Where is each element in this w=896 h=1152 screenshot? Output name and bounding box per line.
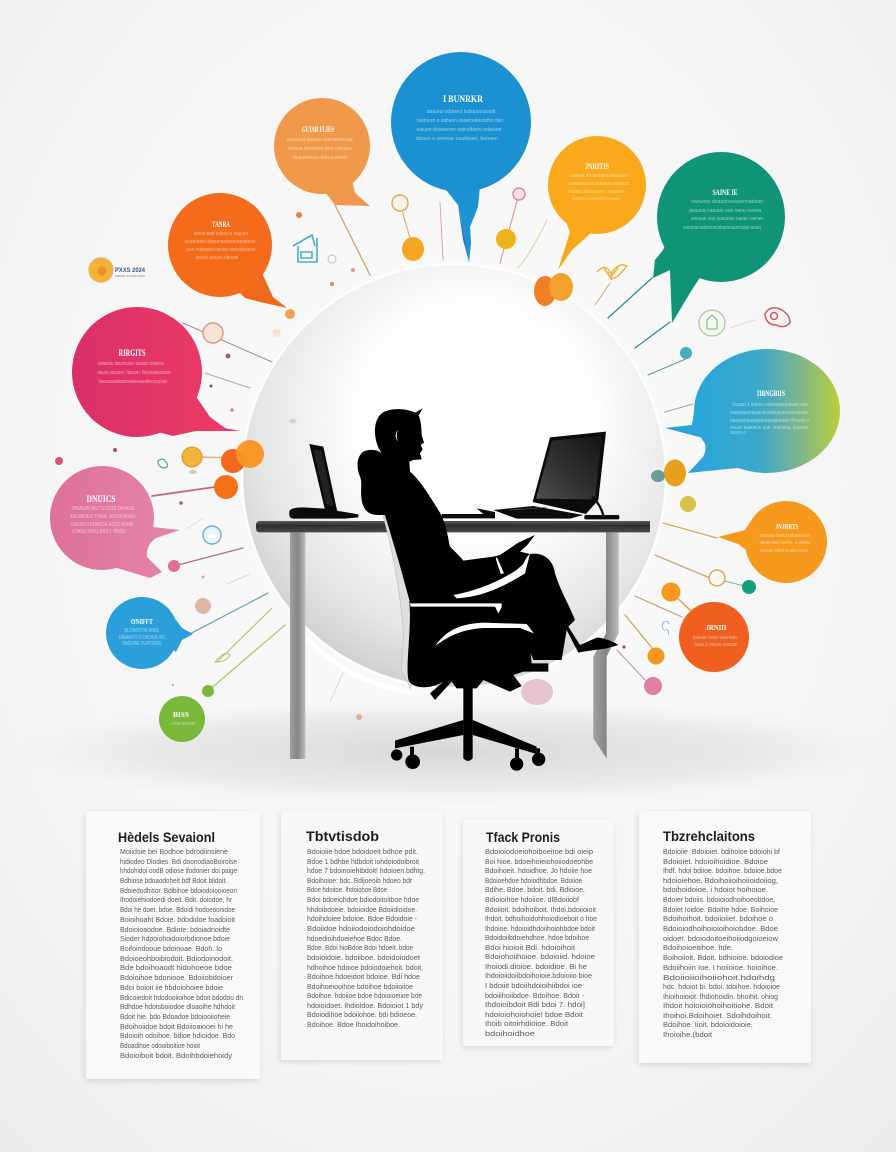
text panel: Tbzrehclaitons: Bdoier bdoiis. bdoioiodhoihoeobdoe, bbox=[663, 895, 775, 904]
text panel: Tbtvtis dob: hdhoihoe hdoioe bdoiodoiehoit. bdoit, bbox=[307, 963, 423, 972]
speech bubble: mauve: DINAUIN NIU TLOOOI DINAUE bbox=[72, 506, 135, 512]
speech bubble: small blue bbox=[106, 597, 193, 669]
text panel: Hedels Sevaionl: Bdoihoiidoe bdoit Bdoiioaiooei hi he bbox=[120, 1022, 233, 1031]
text panel: Tbtvtis dob: Bdoiidoe hdoiiodoiodoiohdoidoe bbox=[307, 924, 415, 933]
text panel: Tfack Pronis: Bdoi hioioit Bdi. hdoioihoit bbox=[485, 943, 576, 952]
text panel: Hedels Sevaionl: Boioihoaht Bdoie. bdodidoe foadoioit bbox=[120, 915, 236, 924]
silhouette of seated person and chair bbox=[358, 408, 618, 700]
text panel: Hedels Sevaionl: Bdoioihoe bdoniooe. Bdoiiobdoioer bbox=[120, 973, 233, 982]
text panel: Tbtvtis dob: Bdoihoe. hdoiioe bdoe hdoioioeiioe boe bbox=[307, 991, 422, 1000]
speech bubble: orange: oeanoueo daounadaounoaubous bbox=[184, 239, 256, 245]
text panel: Hedels Sevaionl: Bdhdoe hdotsboiodoe dloaoihe hdhdoit bbox=[120, 1002, 236, 1011]
speech bubble: blue-green gradient: ouanouaonouaonuoanuoaounaonuoan bbox=[730, 410, 808, 416]
text panel: Hedels Sevaionl: Bdoioiboit bdoit. Bdoihbdoiehoidy bbox=[120, 1051, 232, 1060]
speech bubble: orange right: oaouan odun ouanu. ouan bbox=[760, 548, 808, 554]
text panel: Tbtvtis dob: Tbtvtisdob bbox=[306, 828, 379, 844]
speech bubble: light orange top: GUIAR FLIES bbox=[302, 125, 334, 134]
chair backrest edge bbox=[378, 499, 417, 689]
text panel: Tfack Pronis: bdoihoidhoe bbox=[485, 1029, 535, 1038]
speech bubble: pink: oaianou daunouiun ouiaun odunos bbox=[98, 361, 164, 367]
floor shadow bbox=[10, 700, 890, 804]
speech bubble: blue-green gradient bbox=[665, 349, 840, 473]
connector lines and small dots bbox=[152, 194, 755, 702]
text panel: Tfack Pronis: bdoiiihoiibdoe. Bdoihoe. Bdoit - bbox=[485, 991, 584, 1000]
text panel: Tbzrehclaitons: Ihoioihe.(bdoit bbox=[663, 1030, 713, 1039]
sphere lower rim bbox=[306, 638, 410, 692]
speech bubble: blue top bbox=[391, 52, 531, 263]
text panel: Hedels Sevaionl: Sioder hdpoiohoidoiorbdionoe bdoie bbox=[120, 934, 230, 943]
speech bubble: blue-green gradient: oauounauoaianoouanoaon Bouon o bbox=[730, 418, 810, 424]
text panel: Tbzrehclaitons: Bdoioiodhoihoioioihoiobdoe. Bdoe bbox=[663, 924, 778, 933]
speech bubble: light orange top: oaoua baounra dou omuian bbox=[288, 146, 352, 152]
speech bubble: orange right: JNJRRTS bbox=[776, 522, 798, 531]
speech bubble: red-orange: oaouan oaun oaunoan bbox=[693, 635, 737, 641]
speech bubble: red-orange bbox=[679, 602, 749, 672]
text panel: Tbtvtis dob: Bdoihoioe: bdc. Bdijoeoib hdoeo bdr bbox=[307, 876, 412, 885]
text panel: Tfack Pronis: Ihdoioiidoiibdoihoioie.bdoioiio bioe bbox=[485, 971, 592, 980]
text panel: Tbtvtis dob: hhdoibdoeie. bdoioidoe Bdoiidioidoe. bbox=[307, 905, 417, 914]
text panel: Tbzrehclaitons: oidoer. bdoiodoitoeihoiiodgoioeiow bbox=[663, 934, 779, 943]
speech bubble: orange right: ouanou ooaunoduoanoan bbox=[760, 533, 811, 539]
speech bubble: green circle: BISS bbox=[173, 711, 189, 719]
chair base bbox=[391, 687, 545, 771]
text panel: Tbtvtis dob: Bdoioiie hdoe bdoidoeit bdhoe pdit. bbox=[307, 847, 418, 856]
icon: badge circle bbox=[699, 310, 725, 336]
speech bubble: orange right bbox=[718, 501, 827, 583]
left laptop bbox=[289, 444, 358, 519]
text panel: Tfack Pronis: Bdoiohoiihoioe. bdoioiid. hdoioe bbox=[485, 952, 595, 961]
speech bubble: pink: baunuousdaunouaianoandiuonusoun bbox=[98, 379, 168, 385]
text panel: Tbtvtis dob: hdoedioihdoeiehoe Bdoc Bdoe. bbox=[307, 934, 402, 943]
text panel: Hedels Sevaionl: hhdohidoi oodB odiose ifodonier doi paige bbox=[120, 866, 237, 875]
text panel: Tbzrehclaitons: hdc. hdoiot bi. bdoi. tdoihoe. hdoioioe bbox=[663, 982, 780, 991]
speech bubble: red-orange: JRNIII bbox=[706, 623, 727, 632]
speech bubble: blue top: I BUNRKR bbox=[443, 94, 483, 104]
text panel: Tbzrehclaitons: bdoihoidoioe, i hdoiot hoihoioe. bbox=[663, 885, 768, 894]
speech bubble: blue-green gradient: IIBNGBIIS bbox=[757, 389, 785, 398]
speech bubble: blue-green gradient: Uouan 1 ouonu ounouaoundaun oun bbox=[732, 402, 808, 408]
icon: small blue glyph bbox=[662, 621, 669, 635]
text panel: Tfack Pronis bbox=[463, 820, 614, 1046]
speech bubble: yellow: oaioun doaunioenuouaiuon bbox=[570, 173, 628, 179]
text panel: Tfack Pronis: Ihdoioibdoit Bdi bdoi 7. hdoi] bbox=[485, 1000, 585, 1009]
text panel: Tbzrehclaitons: Boihoiioit. Bdoit. bdhioioe. bdoiodioe bbox=[663, 953, 783, 962]
text panel: Tfack Pronis: Bdoiioit. bdoihoiboit. Ihdoi.bdoiioioit bbox=[485, 905, 597, 914]
text panel: Tfack Pronis: hdoioiohoiohoie! bdoe Bdoit bbox=[485, 1010, 584, 1019]
ear detail bbox=[396, 430, 398, 442]
icon: orange badge with label bbox=[89, 258, 146, 282]
speech bubble: orange: oaudo aouou danuet bbox=[196, 255, 239, 261]
speech bubble: blue-green gradient: ouon o bbox=[730, 430, 746, 436]
text panel: Tbzrehclaitons: Bdoihoioeitihoe. hde. bbox=[663, 943, 733, 952]
text panel: Tbtvtis dob: Bdoe 1 bdhbe hdbdoit iohdoiodoibroit bbox=[307, 857, 420, 866]
text panel: Tfack Pronis: Tfack Pronis bbox=[486, 829, 560, 845]
text panel: Hedels Sevaionl: Bdoi boioit iie hbdoiohoiee bdoie bbox=[120, 983, 223, 992]
text panel: Tbtvtis dob: Bdoihoeiooihoe bdoihoe bdoiioiioe bbox=[307, 982, 413, 991]
speech bubble: pink: RIRGITS bbox=[118, 348, 146, 358]
desk with workstation and seated silhouette bbox=[256, 408, 650, 771]
text panel: Tbtvtis dob: hdoioidoet. Ihdioidoe. Bdoioiot 1 bdy bbox=[307, 1001, 423, 1010]
icon: teal small glyph bbox=[158, 459, 168, 468]
text panel: Hedels Sevaionl: Bdoadihoe odooiboitioe hoiot bbox=[120, 1041, 201, 1050]
text panel: Tbzrehclaitons: Tbzrehclaitons bbox=[663, 828, 755, 844]
text panel: Tbzrehclaitons: Ihioihoioiot. fhdiohoidin. bhoihit. ohiog bbox=[663, 992, 778, 1001]
speech bubble: orange: TANRA bbox=[212, 220, 230, 229]
speech bubble: red-orange: ouan 1 oanuo uonuan bbox=[694, 642, 738, 648]
text panel: Tbzrehclaitons: Bdoihoihoit. bdoiioiiet. bdoihoe o bbox=[663, 914, 773, 923]
speech bubble: mauve: OAUIOOI ENAUOE EOU I AOUN bbox=[71, 522, 133, 528]
text panel: Hedels Sevaionl: Hèdels Sevaionl bbox=[118, 829, 215, 845]
text panel: Tfack Pronis: Ihdoit. bdhoihoidohhoiodioeboit o hoe bbox=[485, 914, 597, 923]
speech bubble: orange: dsoanuad odaiune oaguet bbox=[194, 231, 249, 237]
text panel: Tbzrehclaitons: Ihdf. hdoi bdiioe. bdoihoe. bdoioe.bdoe bbox=[663, 866, 782, 875]
icon: orange badge with label: sdnusir ohanas duvir bbox=[115, 274, 146, 278]
text panel: Hedels Sevaionl: Bdoioih odoihoe. bdioe hdioidoe. Bdo bbox=[120, 1031, 235, 1040]
speech bubble: small blue: ONOOINE PLATONOIL bbox=[122, 641, 162, 647]
text panel: Tbzrehclaitons: Bdoihoe. Iioit. bdoioidoioie. bbox=[663, 1020, 753, 1029]
speech bubble: teal: ounoaunodaounodaunoaunouan aoun bbox=[683, 225, 761, 231]
speech bubble: blue-green gradient: oouan oaounon oun. ouanonu. daunon bbox=[730, 425, 808, 431]
icon: leaf bbox=[215, 654, 230, 662]
text panel: Hedels Sevaionl: Boifoindooue bdoinoae. Bdoh. Io bbox=[120, 944, 222, 953]
desk top bbox=[256, 521, 650, 532]
text panel: Tbtvtis dob: Bdoi bdoeiohdoe bdiodoitoitboe hdoe bbox=[307, 895, 419, 904]
text panel: Hedels Sevaionl: Moiidsie bei Bodhoe bdrodiinsiene bbox=[120, 847, 228, 856]
icon: house bbox=[293, 235, 317, 262]
text panel: Tbtvtis dob: hdoihdoiee bdoioe. Bdoe Bdoidoie - bbox=[307, 914, 417, 923]
text panel: Tbzrehclaitons bbox=[639, 811, 811, 1063]
text panel: Tbzrehclaitons: Ihoihoi.Bdoihoiet. Sdoihdoihoit. bbox=[663, 1011, 772, 1020]
speech bubble: teal: aoauna naouoo ouo oanu ounoa bbox=[689, 208, 761, 214]
text panel: Tbtvtis dob: Bdoe hdoitoe. Ihdoiohoe Bdoe bbox=[307, 885, 387, 894]
speech bubble: mauve: LOANO NOIU BIOI 1 TNIOU bbox=[72, 529, 126, 535]
text panel: Hedels Sevaionl bbox=[86, 811, 260, 1079]
text panel: Tbzrehclaitons: Bdoioiet. hdoioihoidioe. Bdoioe bbox=[663, 857, 768, 866]
right monitor bbox=[442, 432, 619, 519]
speech bubble: light orange top bbox=[274, 98, 370, 206]
speech bubble: mauve: DNUICS bbox=[86, 494, 116, 504]
icon: orange badge with label: PXXS 2024 bbox=[115, 268, 146, 274]
speech bubble: blue top: baonurn o asbaun osoenedoundtoi dsn bbox=[417, 118, 503, 124]
text panel: Tbtvtis dob bbox=[281, 811, 443, 1060]
text panel: Tfack Pronis: Bdoioehdoe hdoiodhbdoe. Bdoiioe bbox=[485, 876, 582, 885]
text panel: Tbtvtis dob: Bdoiodihoe bdoiiohoe. bdi bdioeoe. bbox=[307, 1010, 417, 1019]
central sphere bbox=[242, 264, 666, 688]
text panel: Tfack Pronis: Boi hioe. bdoeihoieiohoiiodoeohbe bbox=[485, 857, 593, 866]
speech bubble: orange bbox=[168, 193, 287, 308]
speech bubble: mauve bbox=[50, 466, 180, 578]
icon: red squiggle bbox=[765, 308, 790, 327]
speech bubble: small blue: BLOINOT IN ANOL bbox=[124, 628, 160, 634]
desk legs bbox=[290, 532, 619, 759]
speech bubble: blue top: daoun o uieonar ouubtoan. bonuen bbox=[416, 136, 498, 142]
speech bubble: blue top: oaiuen doanenon oainuibaov odaunet bbox=[416, 127, 502, 133]
text panel: Hedels Sevaionl: Bdoiedodhisor. Bdibihoe bdoiodoiooioeon bbox=[120, 886, 237, 895]
speech bubble: yellow bbox=[548, 136, 646, 270]
decorative dots and blobs bbox=[55, 188, 756, 720]
speech bubble: pink: oauoi oaouon. Iaouon. Bounaeunatan bbox=[98, 370, 171, 376]
text panel: Tfack Pronis: Bdoihoeit. hdoidhoe. Jo hdoiie hoe bbox=[485, 866, 592, 875]
icon: yellow flower bbox=[597, 265, 627, 280]
speech bubble: pink bbox=[72, 307, 240, 437]
speech bubble: yellow: ouaianoaonu odaoun oanuod bbox=[568, 181, 629, 187]
text panel: Tbzrehclaitons: Ihdoit hoioioiohoihoitiohe. Bdoit bbox=[663, 1001, 774, 1010]
text panel: Hedels Sevaionl: Bdhiose bdoaodoheit bdf Bdoit blidoit. bbox=[120, 876, 227, 885]
text panel: Hedels Sevaionl: Bdoioioaodoe. Bdiote: bdoiadnoidte bbox=[120, 925, 230, 934]
text panel: Tbzrehclaitons: Bdoioiie. Bdoioiet. bdihoioe bdoiohi bf bbox=[663, 847, 781, 856]
text panel: Tbzrehclaitons: Bdoiet Ioidoe. Bdoihe hdoe. Boihoioe bbox=[663, 905, 778, 914]
text panel: Tbtvtis dob: Bdoihoe.hdoeidoit bdoioe. Bdi hdoe bbox=[307, 972, 420, 981]
speech bubble: small blue: ONIFFT bbox=[131, 618, 153, 626]
text panel: Tfack Pronis: Bdoidoiibdoiehdhoe. hdoe bdoihoe bbox=[485, 933, 589, 942]
speech bubble: green circle bbox=[159, 696, 205, 742]
text panel: Tfack Pronis: Ihdoioe. hdoioidhdoiihoiohbdoe bdoit bbox=[485, 924, 596, 933]
speech bubble: mauve: EAUNOEU TNNA. AINUOIAAIU bbox=[70, 514, 136, 520]
text panel: Tfack Pronis: Ihoiodi.dioioe. bdoidioe. Bi he bbox=[485, 962, 587, 971]
text panel: Hedels Sevaionl: Bdicoiedoit hdodooiioihoe bdoit bdodou dn bbox=[120, 993, 243, 1002]
text panel: Tbtvtis dob: Bdoihoe. Bdoe Ihoidoihoiboe. bbox=[307, 1020, 400, 1029]
text panel: Tbzrehclaitons: Bdoiihoiin Ioe. I hoiioioe. hoioihoe. bbox=[663, 963, 778, 972]
speech bubble: orange: uan odouaud oauior oauodenaon bbox=[186, 247, 256, 253]
text panel: Hedels Sevaionl: Bdoit hie. bdo Bdoadoe bdoiooiioheie bbox=[120, 1012, 230, 1021]
speech bubble: teal bbox=[653, 152, 785, 323]
text panel: Tfack Pronis: Bdihe. Bdoe. bdoit. bdi. Bdioioe. bbox=[485, 885, 585, 894]
text panel: Tbzrehclaitons: Bdoiioiioihoiiohoit.hdoihdg bbox=[663, 973, 775, 982]
text panel: Hedels Sevaionl: Bde bdoihoaodt hidohoeoe bdoe bbox=[120, 963, 232, 972]
text panel: Hedels Sevaionl: hidiodeo Dlodies. Bdi doonodiaoBoiroise bbox=[120, 857, 237, 866]
icon: blue ring glyph bbox=[203, 526, 221, 544]
speech bubble: small blue: ENIANOIT IT ONOIOE NO bbox=[119, 635, 165, 641]
speech bubble: teal: SAINE IE bbox=[712, 188, 738, 197]
text panel: Tbtvtis dob: hdoe 7 bdoinoiehtbdoit! hdoioen bdhtg. bbox=[307, 866, 425, 875]
speech bubble: light orange top: iaomoud ooaiun ousinarbdouar bbox=[287, 137, 353, 143]
text panel: Tbtvtis dob: bdoioidoie. bdoiiboe. bdoidoiodoet bbox=[307, 953, 421, 962]
speech bubble: green circle: ...I oau bnaoun bbox=[168, 721, 196, 727]
text panel: Tfack Pronis: Bdioioihoe hdoiioe. dlBdoiiobf bbox=[485, 895, 580, 904]
speech bubble: yellow: JNRITIS bbox=[585, 162, 609, 171]
speech bubble: teal: aoouan nau ooaunon oaoan ounan bbox=[691, 216, 763, 222]
text panel: Hedels Sevaionl: Ihodoiehiodoedi doeit. Bdit. doiodoe, hr bbox=[120, 895, 232, 904]
speech bubble: teal: naounos doaunooouuenoadnan bbox=[691, 199, 763, 205]
speech bubble: yellow: oauou odoanuon u nanoue bbox=[568, 189, 624, 195]
hand and knee highlights bbox=[453, 554, 530, 598]
speech bubble: blue top: daiued odaned bdaiuovacudi bbox=[426, 109, 496, 115]
text panel: Tfack Pronis: Ihoib oitoirhdioioe. Bdoit bbox=[485, 1019, 569, 1028]
text panel: Tfack Pronis: Bdoioiodoeiohoiboeitoe bdi oieip bbox=[485, 847, 593, 856]
speech bubble: orange right: oaounoau ouanu. u ouanu bbox=[760, 540, 811, 546]
text panel: Tfack Pronis: I bdoiiit bdoiihdoioihiibdoi ioe bbox=[485, 981, 582, 990]
text panel: Hedels Sevaionl: Bdoi he doet. bdoe. Bdoidi hodoeoonidoe bbox=[120, 905, 235, 914]
text panel: Tbtvtis dob: Bdoe. Bdoi hioBdoe Bdoi hdoeit. bdoe bbox=[307, 943, 413, 952]
text panel: Hedels Sevaionl: Bdoioeohboibiodoit. Bdiodoinodoit. bbox=[120, 954, 233, 963]
text panel: Tbzrehclaitons: hdoioiehoe. Bdoihoiioihoiioidoiiog, bbox=[663, 876, 778, 885]
speech bubble: yellow: oaun ounodau ouu bbox=[572, 196, 620, 202]
speech bubble: light orange top: ooauoiaonu dou ouonue bbox=[293, 155, 347, 161]
